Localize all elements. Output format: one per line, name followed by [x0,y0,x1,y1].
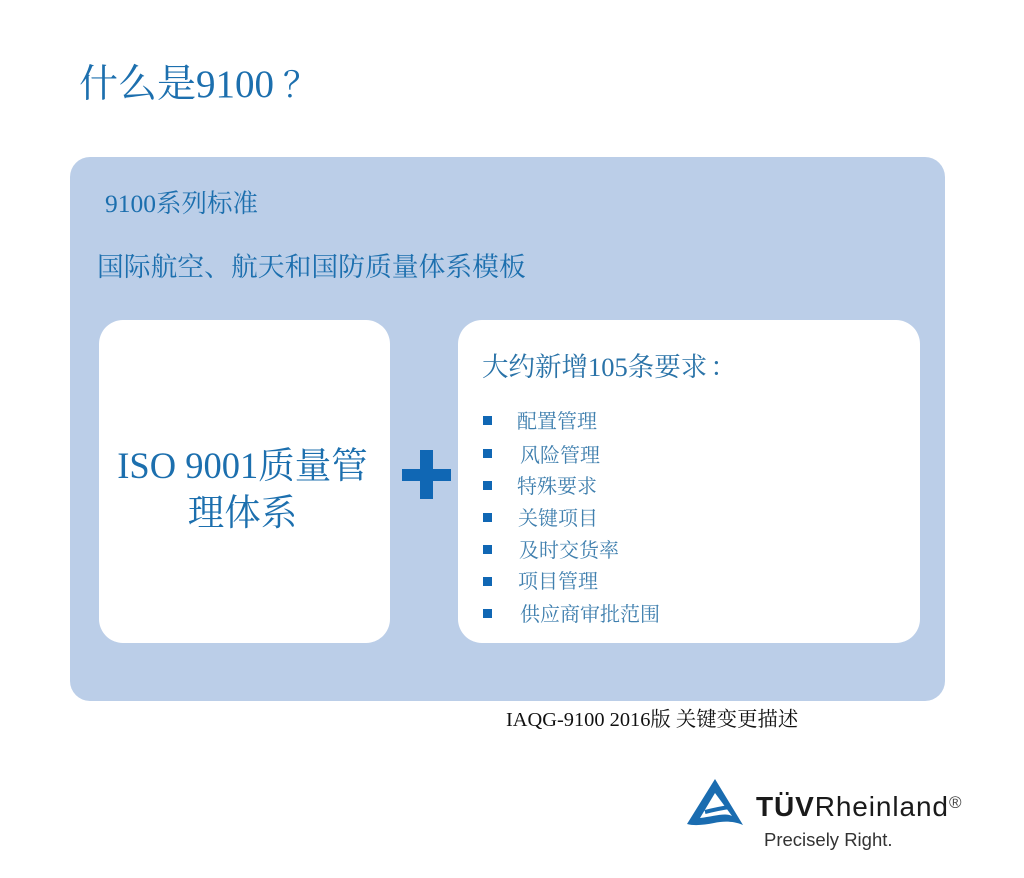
caption: source: IAQG-9100 2016版 关键变更描述 [506,709,798,731]
registered mark: ® [949,793,962,812]
panel: ISO 9001 [99,320,390,643]
bullet [483,545,492,554]
text: ISO 9001 quality management system: 理体系 [188,492,297,533]
bullet [483,481,492,490]
item: 项目管理 [518,571,598,593]
item: 风险管理 [520,445,600,467]
heading: 9100 series: 9100系列标准 [105,189,258,218]
wordmark: TÜVRheinland [756,791,949,822]
item: 供应商审批范围 [520,604,660,626]
text: ISO 9001 quality management system [117,445,368,533]
panel: new requirements [458,320,920,643]
bullet [483,449,492,458]
heading: about 105 new requirements: 大约新增105条要求： [482,352,737,382]
title: 什么是9100 ？ [79,63,318,106]
bullet [483,513,492,522]
item: 及时交货率 [519,540,619,562]
item: 关键项目 [518,508,598,530]
subheading: quality system template: 国际航空、航天和国防质量体系模板 [97,252,526,282]
icon: plus sign [402,450,451,499]
icon: triangle mark [687,779,743,826]
item: 配置管理 [517,411,597,433]
tagline: Precisely Right. [764,829,893,850]
bullet [483,416,492,425]
list: requirements [483,411,660,626]
panel: 9100 series standard [70,157,945,701]
item: 特殊要求 [517,476,597,498]
text: ISO 9001 quality management system: ISO 9001质量管 [117,445,368,486]
bullet [483,609,492,618]
logo: TÜV Rheinland [687,779,962,850]
bullet [483,577,492,586]
